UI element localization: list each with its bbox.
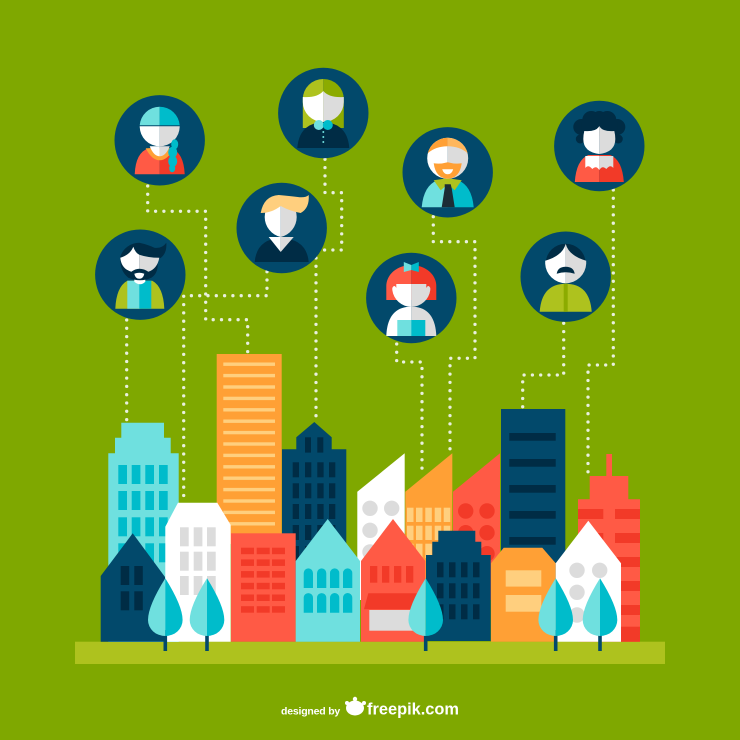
- building: dark stepped front: [426, 531, 491, 641]
- building: cyan tower: [108, 423, 179, 642]
- house: white with circles: [556, 521, 621, 642]
- house: cyan with arched windows: [296, 519, 360, 642]
- building: dark tall tower: [501, 409, 565, 579]
- freepik credit logo: designed by: [281, 706, 340, 718]
- avatar: man with blond quiff: [237, 183, 327, 273]
- tree 3: [408, 578, 443, 651]
- building: red front: [231, 533, 296, 642]
- building: white front: [165, 503, 231, 642]
- dotted connector lines: [127, 159, 613, 496]
- avatar: man with beard: [95, 230, 186, 320]
- tree 2: [190, 578, 224, 651]
- freepik credit logo: freepik.com: [367, 700, 459, 718]
- avatar: girl with red hair and bow: [366, 253, 456, 343]
- avatar: woman with braid: [114, 95, 205, 186]
- avatar: woman with long green hair: [278, 68, 368, 158]
- house: red shop with awning: [361, 519, 425, 642]
- house: dark: [101, 533, 165, 642]
- tree 5: [583, 578, 617, 651]
- avatar: man with tie and ginger beard: [402, 127, 493, 218]
- building: orange slanted roof: [405, 453, 452, 600]
- tree 1: [148, 578, 183, 651]
- tree 4: [538, 578, 573, 651]
- building: orange striped tower: [217, 354, 282, 544]
- building: red tower with spire: [578, 454, 640, 642]
- ground strip: [75, 642, 665, 664]
- building: red slanted roof: [453, 453, 500, 600]
- building: orange front: [491, 548, 556, 642]
- freepik credit logo: [281, 697, 459, 718]
- icon: freepik mascot: [345, 697, 366, 716]
- building: dark pointed tower: [282, 422, 346, 600]
- avatar: man with moustache: [520, 232, 611, 322]
- avatar: woman with curly dark hair: [554, 101, 644, 191]
- building: white slanted roof: [357, 453, 405, 600]
